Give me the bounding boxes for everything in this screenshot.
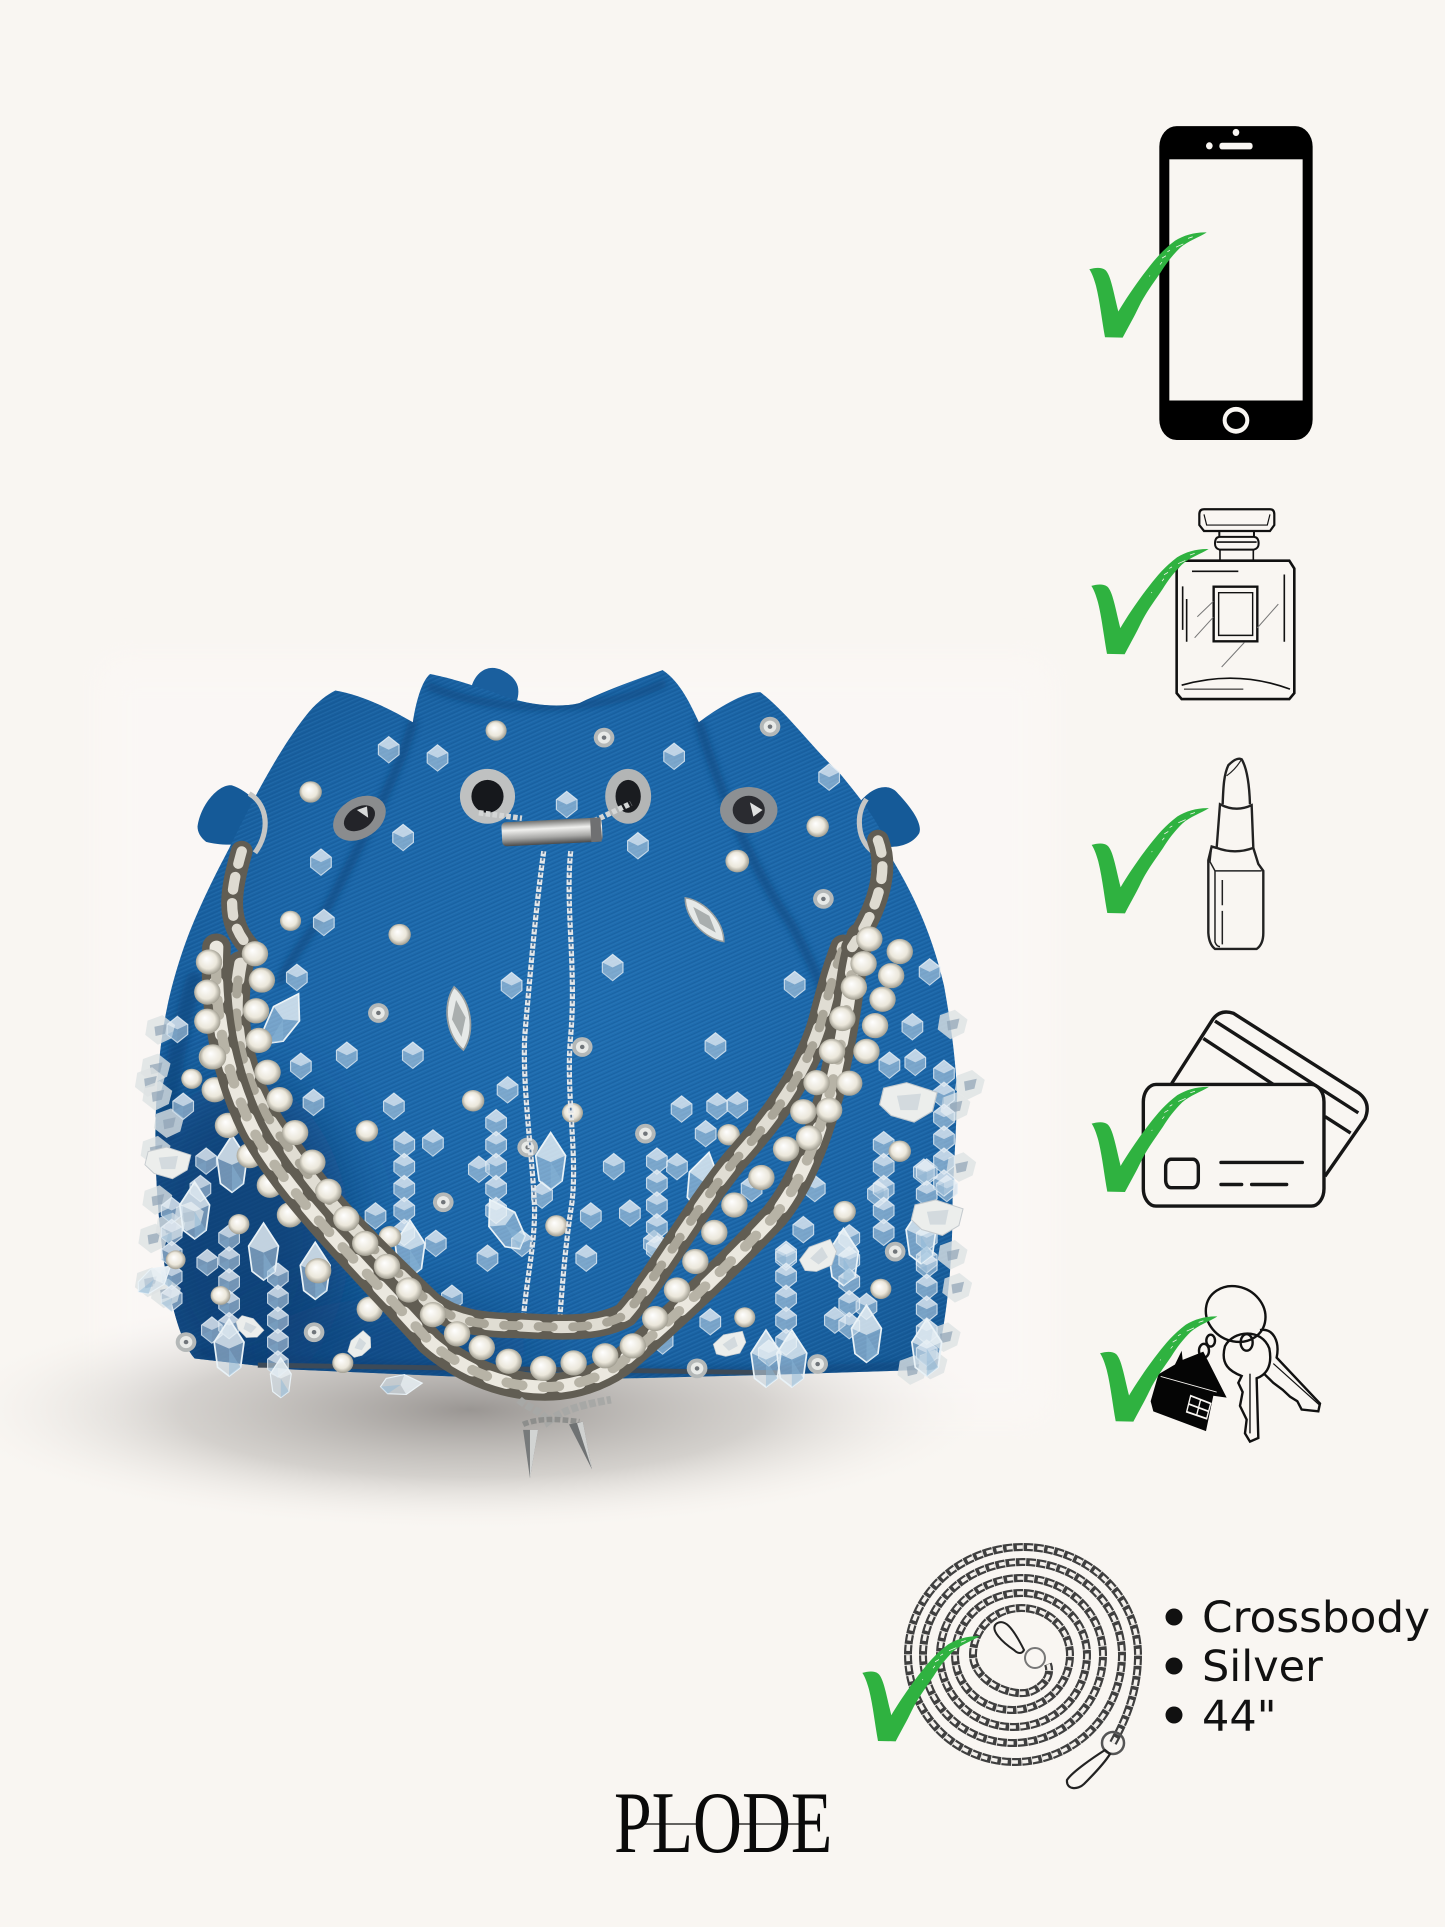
bag bottom edge bbox=[258, 1365, 780, 1373]
thin drawstring chains bbox=[479, 803, 631, 1326]
house fob bbox=[1151, 1351, 1227, 1431]
denim twill texture bbox=[155, 670, 957, 1380]
bag shadow bbox=[0, 1288, 1000, 1532]
scattered beads and sequins bbox=[167, 717, 957, 1378]
bullet: 44" bbox=[1166, 1692, 1276, 1742]
eyelet 3 bbox=[605, 769, 651, 824]
eyelet 2 bbox=[460, 769, 515, 824]
hanging spike charms bbox=[519, 1400, 611, 1478]
bag rear knot bbox=[470, 668, 518, 703]
side rings bbox=[249, 794, 872, 853]
navette rhinestones bbox=[443, 892, 732, 1051]
pearl strands on strap bbox=[194, 926, 913, 1381]
chain spiral bbox=[908, 1547, 1138, 1762]
bullet: Crossbody: Crossbody bbox=[1202, 1593, 1430, 1643]
icon: house keys bbox=[1151, 1281, 1320, 1442]
outer clasp bbox=[1067, 1732, 1124, 1788]
icon: lipstick bbox=[1208, 759, 1263, 949]
pearls beneath the left chain bbox=[199, 1044, 383, 1322]
icon: credit cards bbox=[1143, 1012, 1367, 1206]
edge crystal clutter bbox=[135, 1010, 985, 1385]
main silver chain strap bbox=[216, 840, 882, 1387]
scattered pearls bbox=[166, 720, 911, 1373]
product: blue denim bucket bag bbox=[131, 668, 985, 1478]
eyelet 1 bbox=[324, 786, 395, 850]
eyelet 4 bbox=[720, 787, 777, 833]
crystal drops bbox=[132, 987, 942, 1398]
brand logo: PLODE: PLODE bbox=[614, 1774, 832, 1871]
drawstring toggle cylinder bbox=[501, 817, 603, 847]
icon: green check on cards bbox=[1092, 1087, 1209, 1192]
chain specification list bbox=[1166, 1593, 1430, 1742]
icon: green check on smartphone bbox=[1089, 232, 1207, 338]
icon: smartphone bbox=[1159, 126, 1313, 440]
bag side tab right bbox=[858, 787, 920, 847]
bag body bbox=[155, 670, 957, 1380]
icon: green check on chain bbox=[862, 1636, 980, 1741]
background halo around bag bbox=[100, 660, 1050, 1420]
eyelets bbox=[324, 769, 777, 850]
icon: green check on keys bbox=[1100, 1316, 1217, 1422]
second key bbox=[1260, 1330, 1320, 1411]
bullet: Silver: Silver bbox=[1202, 1642, 1323, 1692]
fabric folds shading bbox=[131, 684, 932, 1397]
inner clasp bbox=[994, 1622, 1045, 1668]
icon: perfume bottle bbox=[1177, 509, 1294, 699]
icon: green check on perfume bbox=[1091, 549, 1209, 654]
bullet: 44": 44" bbox=[1202, 1692, 1276, 1742]
first key bbox=[1224, 1334, 1270, 1442]
beaded vertical strands bbox=[161, 1082, 954, 1377]
clear chunky crystals bbox=[145, 1083, 963, 1363]
icon: coiled crossbody chain bbox=[908, 1547, 1138, 1788]
bag side tab left bbox=[198, 785, 270, 845]
icon: green check on lipstick bbox=[1092, 808, 1209, 913]
key ring bbox=[1199, 1281, 1320, 1442]
